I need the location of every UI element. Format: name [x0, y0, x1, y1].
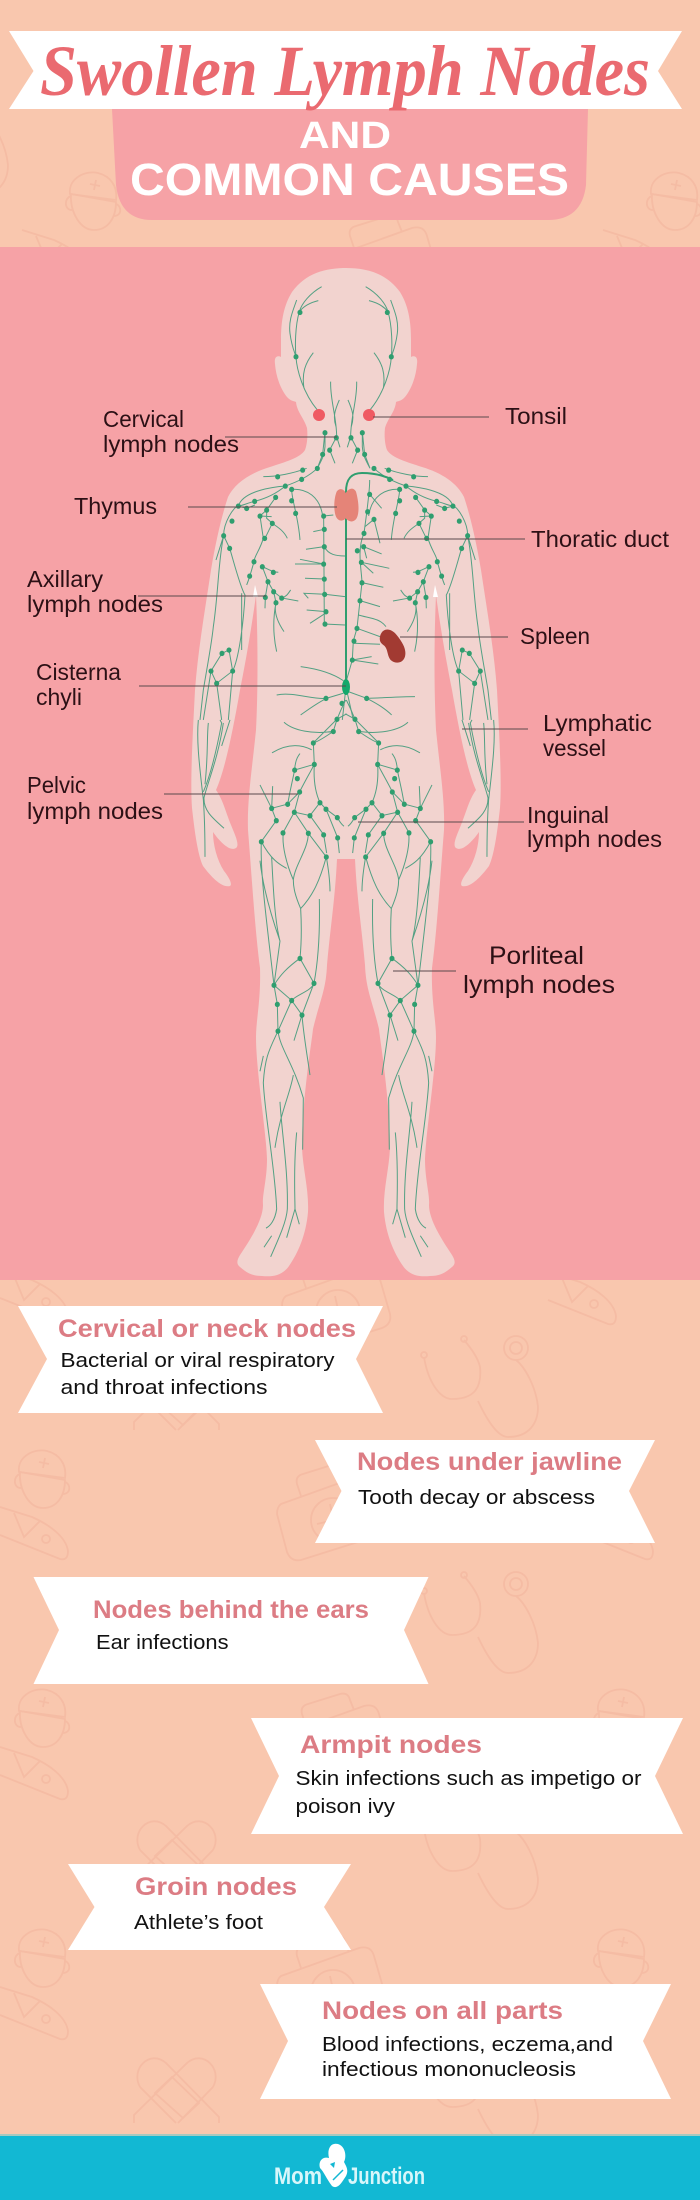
logo text: Junction — [348, 2163, 425, 2190]
icon: MomJunction logo mark — [319, 2144, 347, 2187]
label: cervical lymph nodes: lymph nodes — [103, 431, 239, 457]
thymus — [334, 489, 359, 521]
label: tonsil: Tonsil — [505, 403, 567, 429]
label: thoratic duct: Thoratic duct — [531, 526, 670, 552]
panel: nodes on all parts: infectious mononucleosis — [322, 2059, 576, 2081]
logo text: Mom — [274, 2163, 322, 2190]
subtitle: AND — [299, 115, 391, 157]
label: cisterna chyli: chyli — [36, 684, 82, 710]
cisterna chyli — [342, 679, 350, 695]
panel: armpit nodes: Skin infections such as impetigo or — [296, 1768, 642, 1790]
panel: nodes under jawline — [315, 1440, 655, 1543]
label: cervical lymph nodes — [103, 406, 239, 457]
panel: nodes behind the ears: Ear infections — [96, 1632, 228, 1654]
panel: armpit nodes: Armpit nodes — [300, 1731, 482, 1759]
label: inguinal lymph nodes: lymph nodes — [527, 826, 662, 852]
lymph vessels upper body — [200, 287, 491, 720]
label: cisterna chyli: Cisterna — [36, 659, 121, 685]
panel: nodes under jawline: Tooth decay or abscess — [358, 1487, 595, 1509]
panel: armpit nodes — [251, 1718, 683, 1834]
label: lymphatic vessel: vessel — [543, 735, 606, 761]
label: pelvic lymph nodes: Pelvic — [27, 772, 86, 798]
footer — [0, 2134, 700, 2200]
lymph vessels lower body — [198, 700, 494, 1257]
leader lines — [138, 417, 528, 971]
panel: cervical or neck nodes: Bacterial or viral respiratory — [60, 1350, 334, 1372]
label: spleen: Spleen — [520, 623, 590, 649]
panel: cervical or neck nodes: Cervical or neck nodes — [58, 1315, 356, 1343]
panel: lymphatic system — [0, 247, 700, 1280]
label: thymus: Thymus — [74, 493, 157, 519]
label: porliteal lymph nodes: lymph nodes — [463, 971, 615, 999]
panel: nodes on all parts: Blood infections, eczema,and — [322, 2034, 613, 2056]
label: inguinal lymph nodes — [527, 802, 662, 852]
label: pelvic lymph nodes — [27, 772, 163, 824]
label: axillary lymph nodes — [27, 566, 163, 617]
panel: nodes behind the ears: Nodes behind the ears — [93, 1596, 369, 1624]
subtitle panel — [112, 109, 588, 220]
label: porliteal lymph nodes: Porliteal — [489, 942, 584, 970]
panel: armpit nodes: poison ivy — [296, 1796, 395, 1818]
panel: cervical or neck nodes: and throat infections — [60, 1377, 268, 1399]
label: cervical lymph nodes: Cervical — [103, 406, 184, 432]
panel: nodes under jawline: Nodes under jawline — [357, 1448, 622, 1476]
body silhouette — [191, 268, 501, 1276]
label: lymphatic vessel — [543, 710, 652, 761]
tonsils — [313, 409, 375, 421]
thoracic duct — [346, 473, 393, 680]
label: cisterna chyli — [36, 659, 121, 710]
label: pelvic lymph nodes: lymph nodes — [27, 798, 163, 824]
label: lymphatic vessel: Lymphatic — [543, 710, 652, 736]
title ribbon — [9, 31, 682, 109]
subtitle: COMMON CAUSES — [130, 154, 569, 205]
panel: nodes on all parts: Nodes on all parts — [322, 1997, 563, 2025]
label: axillary lymph nodes: Axillary — [27, 566, 104, 592]
panel: cervical or neck nodes — [18, 1306, 383, 1413]
spleen — [380, 629, 405, 663]
panel: nodes on all parts — [260, 1984, 671, 2099]
title: Swollen Lymph Nodes — [40, 31, 650, 111]
label: porliteal lymph nodes — [463, 942, 615, 999]
panel: groin nodes: Groin nodes — [135, 1873, 297, 1901]
logo text — [274, 2163, 425, 2190]
panel: groin nodes — [68, 1864, 351, 1950]
subtitle — [130, 115, 569, 205]
panel: nodes behind the ears — [34, 1577, 428, 1684]
label: axillary lymph nodes: lymph nodes — [27, 591, 163, 617]
label: inguinal lymph nodes: Inguinal — [527, 802, 609, 828]
panel: groin nodes: Athlete’s foot — [134, 1912, 263, 1934]
